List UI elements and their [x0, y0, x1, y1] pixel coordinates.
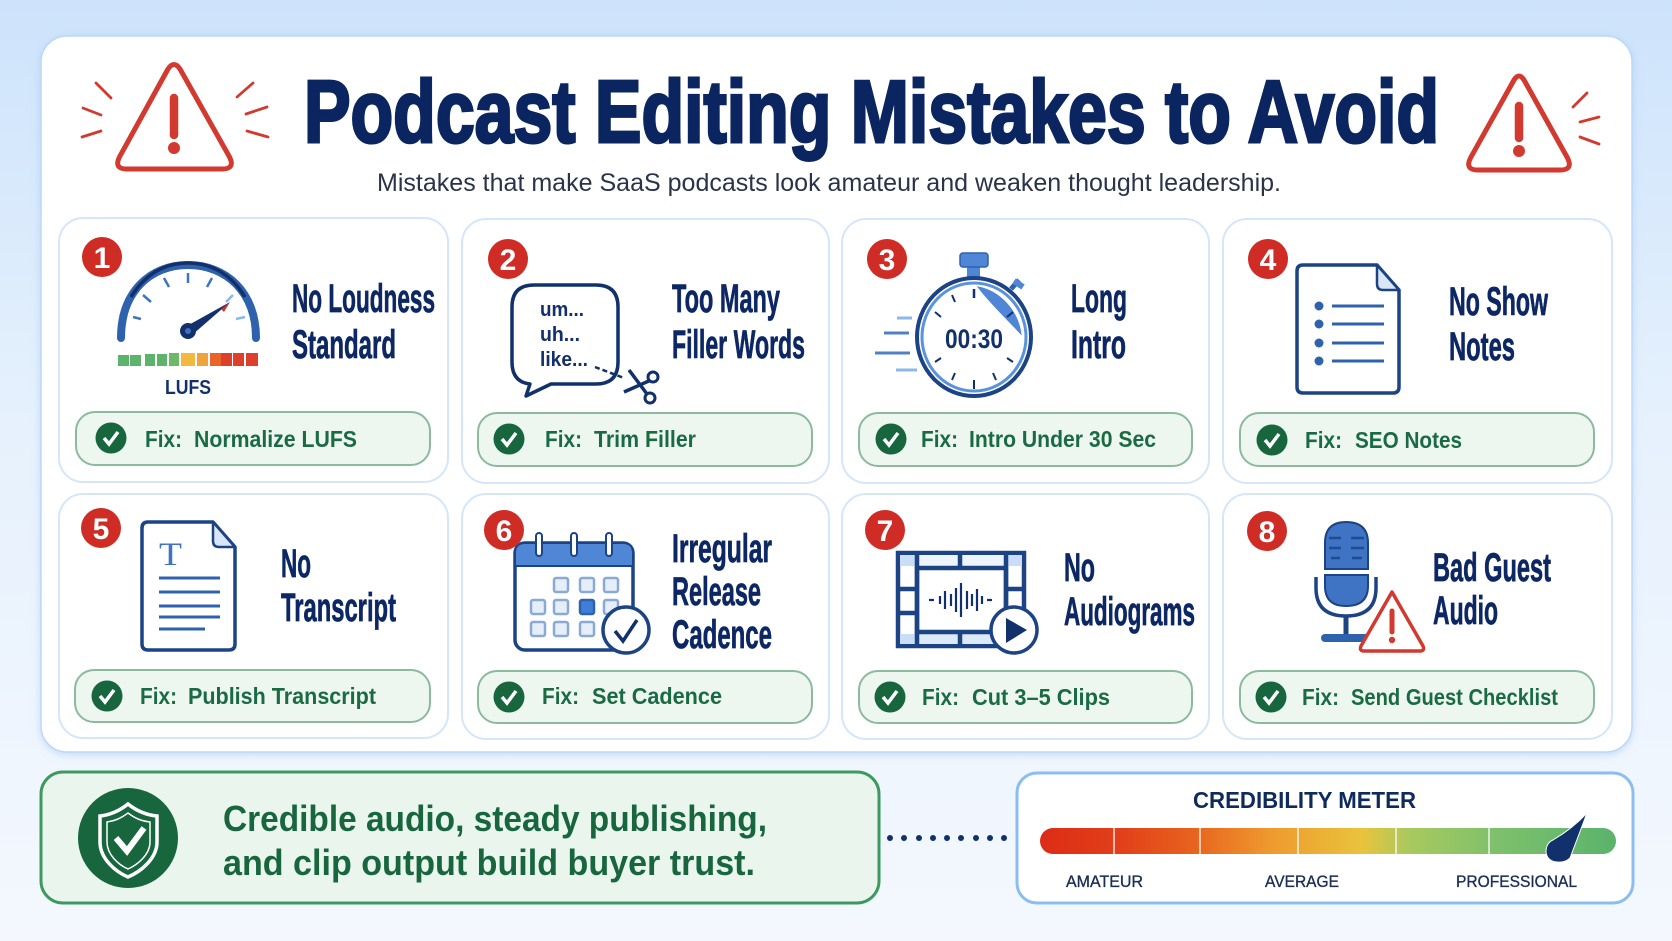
icon: transcript document: T: [159, 537, 182, 573]
meter title: CREDIBILITY METER: [1193, 787, 1416, 813]
icon: transcript document: [142, 522, 235, 650]
badge 6: 6: [496, 515, 512, 548]
badge 5: 5: [93, 513, 109, 546]
card 1 heading: Standard: [292, 323, 396, 367]
fix pill 1: Normalize LUFS: [194, 426, 357, 452]
card 7: no audiograms: [842, 494, 1209, 739]
dotted connector: [887, 835, 1007, 841]
credibility meter panel: [1017, 773, 1633, 903]
card 1: no loudness standard: [59, 218, 448, 482]
meter labels: PROFESSIONAL: [1456, 872, 1577, 891]
icon: loudness gauge: [118, 263, 258, 399]
card 8 heading: Audio: [1433, 589, 1498, 633]
badge 8: [1247, 511, 1287, 551]
icon: stopwatch: 00:30: [945, 324, 1003, 354]
card 3 heading: Long: [1071, 277, 1127, 321]
card 6 heading: Irregular: [672, 527, 772, 571]
icon: shield check: [78, 788, 178, 888]
fix pill 6: Fix:: [542, 683, 579, 709]
card 3 heading: [1071, 277, 1127, 367]
card 8: bad guest audio: [1223, 494, 1612, 739]
card 8 heading: Bad Guest: [1433, 546, 1551, 590]
main panel: [41, 36, 1632, 752]
card 6 heading: Cadence: [672, 613, 772, 657]
fix pill 6: [478, 671, 812, 723]
fix pill 3: Intro Under 30 Sec: [969, 426, 1156, 452]
fix pill 7: Fix:: [922, 684, 959, 710]
card 7 heading: No: [1064, 546, 1095, 590]
meter bar: [1040, 828, 1616, 854]
badge 4: [1248, 239, 1288, 279]
fix pill 6: Set Cadence: [592, 683, 722, 709]
gauge label: LUFS: [165, 377, 211, 399]
fix pill 7: [859, 671, 1192, 723]
card 5 heading: Transcript: [281, 586, 396, 630]
fix pill 4: Fix:: [1305, 427, 1342, 453]
card 2: too many filler words: [462, 219, 829, 483]
takeaway panel: [41, 772, 879, 903]
fix pill 8: Fix:: [1302, 684, 1339, 710]
fix pill 7: Cut 3–5 Clips: [972, 684, 1110, 710]
badge 1: [82, 237, 122, 277]
card 2 heading: Filler Words: [672, 323, 805, 367]
card 6: irregular release cadence: [462, 494, 829, 739]
icon: calendar: [515, 533, 649, 653]
badge 4: 4: [1260, 244, 1277, 277]
meter labels: AMATEUR: [1066, 872, 1143, 891]
fix pill 5: Fix:: [140, 683, 177, 709]
badge 5: [81, 508, 121, 548]
card 6 heading: [672, 527, 772, 657]
badge 6: [484, 510, 524, 550]
fix pill 2: [478, 413, 812, 466]
takeaway text: Credible audio, steady publishing,: [223, 798, 767, 839]
card 8 heading: [1433, 546, 1551, 633]
fix pill 2: Trim Filler: [594, 426, 696, 452]
card 5 heading: [281, 542, 396, 630]
icon: stopwatch: [875, 253, 1031, 396]
fix pill 1: [76, 412, 430, 465]
icon: filmstrip with waveform: [898, 553, 1037, 653]
fix pill 8: [1240, 671, 1594, 723]
takeaway text: [223, 798, 767, 883]
card 3: long intro: [842, 219, 1209, 483]
icon: left warning triangle: [82, 64, 268, 169]
takeaway text: and clip output build buyer trust.: [223, 842, 755, 883]
fix pill 8: Send Guest Checklist: [1351, 684, 1558, 710]
fix pill 3: [859, 413, 1192, 466]
fix pill 4: [1240, 413, 1594, 466]
card 5: no transcript: [59, 494, 448, 738]
card 2 heading: [672, 277, 805, 367]
meter labels: AVERAGE: [1265, 872, 1339, 891]
card 6 heading: Release: [672, 570, 761, 614]
card 4 heading: Notes: [1449, 325, 1515, 369]
icon: speech bubble with scissors: um...: [540, 299, 584, 321]
icon: microphone with warning: [1316, 522, 1424, 651]
badge 8: 8: [1259, 516, 1275, 549]
badge 3: 3: [879, 244, 895, 277]
fix pill 1: Fix:: [145, 426, 182, 452]
card 4: no show notes: [1223, 219, 1612, 483]
fix pill 3: Fix:: [921, 426, 958, 452]
badge 7: 7: [877, 515, 893, 548]
badge 7: [865, 510, 905, 550]
card 4 heading: [1449, 280, 1549, 369]
icon: notes document: [1297, 265, 1399, 393]
meter labels: [1066, 872, 1577, 891]
badge 2: [488, 239, 528, 279]
card 1 heading: No Loudness: [292, 277, 435, 321]
icon: speech bubble with scissors: uh...: [540, 324, 580, 346]
meter needle: [1546, 813, 1587, 862]
badge 2: 2: [500, 244, 516, 277]
card 4 heading: No Show: [1449, 280, 1549, 324]
fix pill 2: Fix:: [545, 426, 582, 452]
icon: speech bubble with scissors: [512, 285, 658, 403]
card 1 heading: [292, 277, 435, 367]
badge 1: 1: [94, 242, 110, 275]
icon: speech bubble with scissors: like...: [540, 349, 588, 371]
subtitle: Mistakes that make SaaS podcasts look amateur and weaken thought leadership.: [377, 169, 1281, 197]
badge 3: [867, 239, 907, 279]
card 7 heading: Audiograms: [1064, 590, 1195, 634]
fix pill 5: Publish Transcript: [188, 683, 376, 709]
icon: right warning triangle: [1469, 76, 1599, 170]
card 2 heading: Too Many: [672, 277, 780, 321]
card 5 heading: No: [281, 542, 311, 586]
card 3 heading: Intro: [1071, 323, 1126, 367]
fix pill 4: SEO Notes: [1355, 427, 1462, 453]
card 7 heading: [1064, 546, 1195, 634]
fix pill 5: [75, 670, 430, 722]
